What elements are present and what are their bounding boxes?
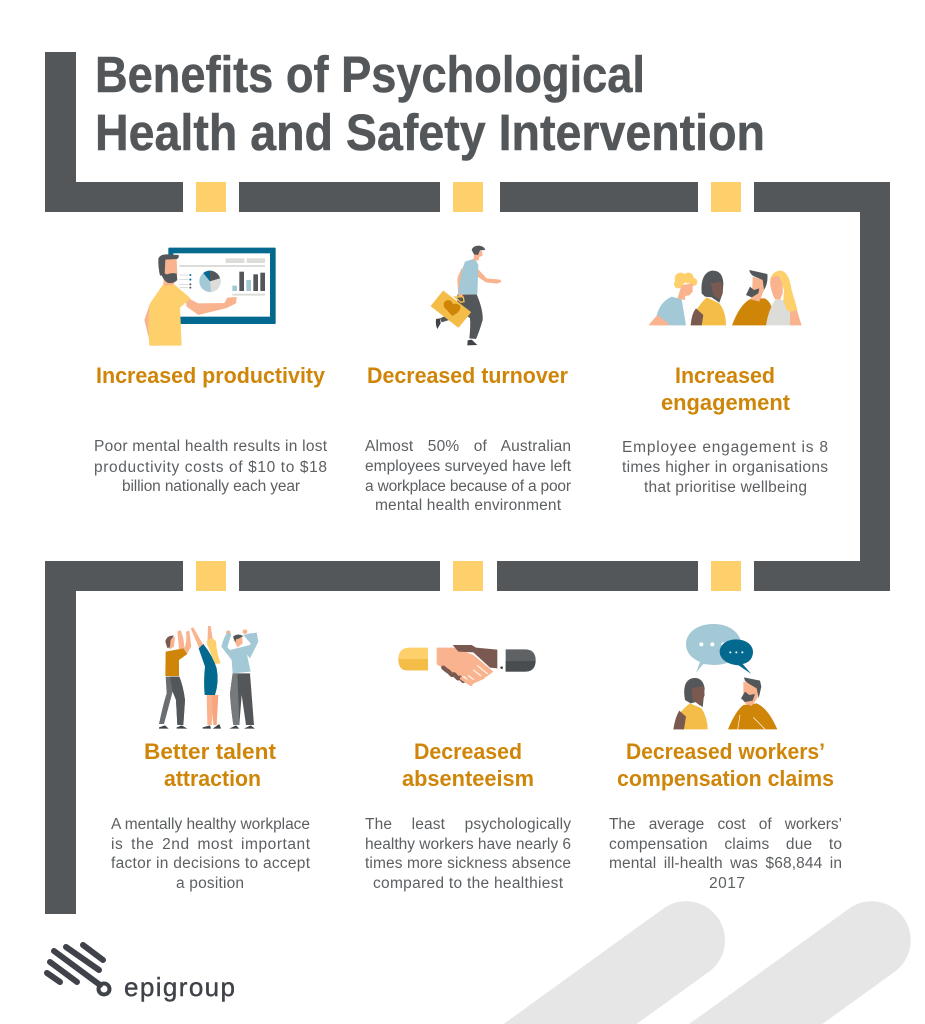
heading: attraction <box>164 766 261 791</box>
panel: decreased absenteeism <box>365 645 571 892</box>
body text: Employee engagement is 8 <box>622 439 828 456</box>
icon: man walking away with briefcase <box>432 246 502 345</box>
panel: decreased workers' compensation claims <box>609 624 842 892</box>
title: Benefits of Psychological <box>95 46 645 103</box>
logo: epigroup <box>47 945 235 1002</box>
heading <box>617 739 834 791</box>
body text <box>609 816 842 892</box>
heading <box>661 363 790 415</box>
body text <box>365 438 572 514</box>
body text: a position <box>176 875 244 892</box>
body text: times higher in organisations <box>622 459 828 476</box>
wordmark: epigroup <box>124 972 235 1002</box>
body text: compensation claims due to <box>609 836 842 853</box>
heading: Increased <box>675 363 775 388</box>
body text: mental health environment <box>375 497 562 514</box>
body text <box>111 816 311 892</box>
panel: better talent attraction <box>111 626 311 892</box>
panel: increased engagement <box>622 270 828 496</box>
body text: Poor mental health results in lost <box>94 438 328 455</box>
heading: Decreased workers’ <box>626 739 825 764</box>
body text: A mentally healthy workplace <box>111 816 310 833</box>
title: Health and Safety Intervention <box>95 104 765 161</box>
icon: epigroup mark <box>47 945 110 994</box>
panel: decreased turnover <box>365 246 572 514</box>
body text: Almost 50% of Australian <box>365 438 571 455</box>
heading: absenteeism <box>402 766 534 791</box>
heading <box>402 739 534 791</box>
body text: healthy workers have nearly 6 <box>365 836 571 853</box>
body text: The average cost of workers’ <box>609 816 842 833</box>
body text: 2017 <box>709 875 745 892</box>
body text: compared to the healthiest <box>373 875 564 892</box>
frame: dark connector path with yellow squares <box>45 52 890 914</box>
body text: that prioritise wellbeing <box>644 479 807 496</box>
icon: two people talking with speech bubbles <box>673 624 777 729</box>
body text: billion nationally each year <box>122 478 300 495</box>
icon: man presenting at a screen <box>144 248 276 346</box>
heading: Better talent <box>144 739 277 764</box>
body text: employees surveyed have left <box>365 458 572 475</box>
decorative diagonal stripes <box>504 901 911 1024</box>
heading: Increased productivity <box>96 363 325 388</box>
heading: engagement <box>661 390 790 415</box>
body text: a workplace because of a poor <box>365 478 571 495</box>
body text: factor in decisions to accept <box>111 855 311 872</box>
body text: The least psychologically <box>365 816 571 833</box>
body text <box>622 439 828 496</box>
title <box>95 46 765 161</box>
body text: productivity costs of $10 to $18 <box>94 459 327 476</box>
icon: three colleagues high-fiving <box>159 626 258 729</box>
body text: is the 2nd most important <box>111 836 311 853</box>
icon: handshake <box>398 645 536 684</box>
heading: Decreased <box>414 739 522 764</box>
heading: Decreased turnover <box>367 363 568 388</box>
body text <box>365 816 571 892</box>
icon: group of four colleagues <box>648 270 802 325</box>
body text <box>94 438 328 495</box>
panel: increased productivity <box>94 248 328 495</box>
body text: mental ill-health was $68,844 in <box>609 855 842 872</box>
heading: compensation claims <box>617 766 834 791</box>
body text: times more sickness absence <box>365 855 571 872</box>
heading <box>144 739 277 791</box>
